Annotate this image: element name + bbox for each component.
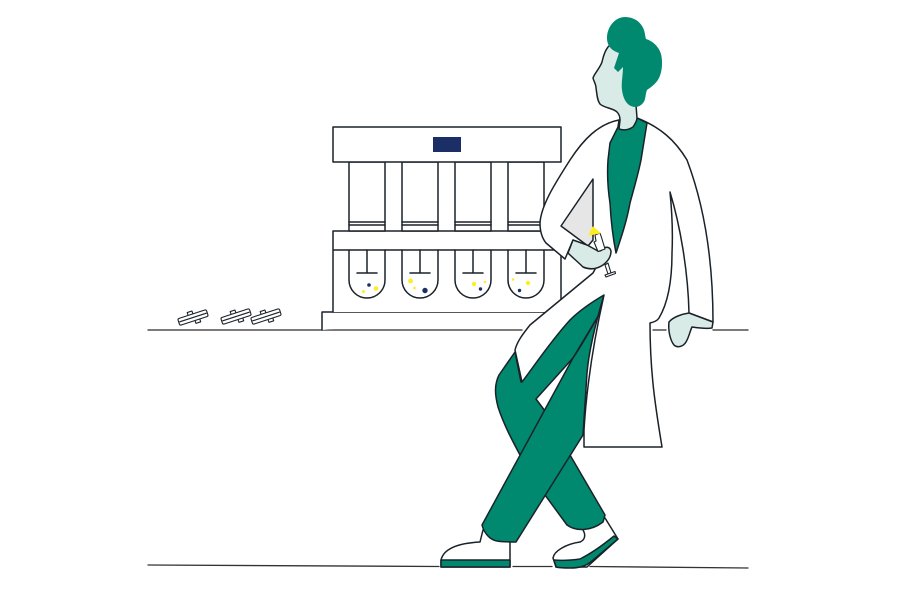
face and neck bbox=[593, 35, 642, 130]
upper columns bbox=[349, 162, 544, 231]
floor line bbox=[148, 565, 748, 568]
filter 1 bbox=[177, 307, 209, 328]
clipboard bbox=[561, 179, 593, 246]
hand holding syringe bbox=[568, 240, 611, 269]
vessel 2 bbox=[402, 250, 438, 298]
filters on the table bbox=[177, 306, 282, 328]
vessel 3 bbox=[455, 250, 491, 298]
scientist bbox=[441, 17, 713, 568]
lab coat bbox=[515, 118, 713, 447]
vessel 1 bbox=[349, 250, 385, 298]
dissolution apparatus bbox=[322, 127, 561, 330]
filter 2 bbox=[220, 306, 252, 327]
display panel bbox=[433, 137, 461, 152]
table line bbox=[148, 329, 748, 331]
apparatus base bbox=[322, 312, 561, 330]
front leg bbox=[482, 295, 604, 542]
syringe bbox=[589, 227, 616, 277]
shoe: back foot bbox=[553, 518, 618, 568]
rack body bbox=[333, 231, 561, 312]
back leg bbox=[496, 295, 605, 530]
right hand bbox=[669, 313, 713, 347]
filter 3 bbox=[250, 306, 282, 327]
shoe: front foot bbox=[441, 530, 510, 567]
vessel 4 bbox=[508, 250, 544, 298]
hair bbox=[607, 17, 662, 107]
head unit bbox=[333, 127, 561, 162]
scrub top bbox=[608, 118, 647, 253]
